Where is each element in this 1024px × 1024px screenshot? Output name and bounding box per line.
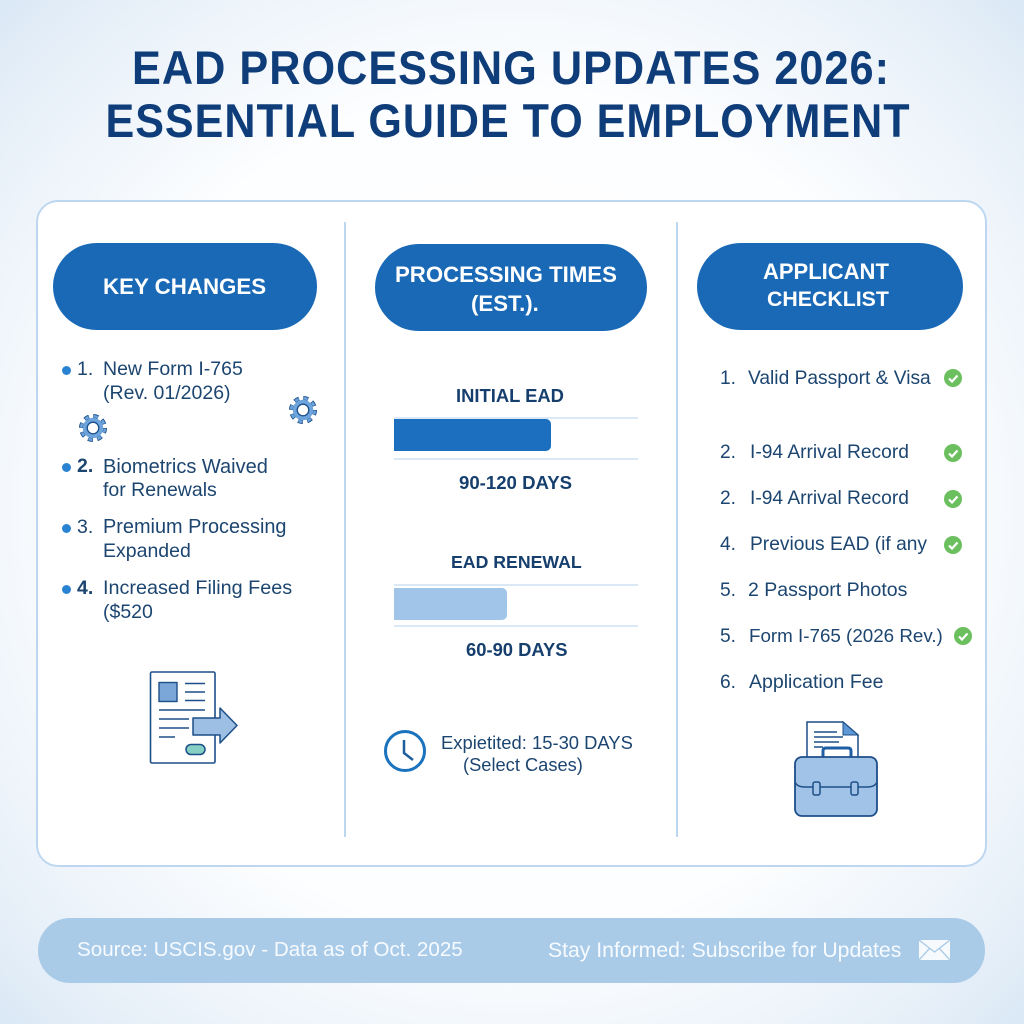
bar (394, 588, 507, 620)
expedited note: Expietited: 15-30 DAYS (441, 732, 633, 753)
heading: processing times: PROCESSING TIMES (395, 262, 617, 287)
heading: applicant checklist: APPLICANT (763, 259, 889, 284)
bar (394, 419, 551, 451)
item 4: Increased Filing Fees (103, 577, 292, 599)
item 5: 2 Passport Photos (748, 579, 907, 601)
icon: gear left (79, 414, 107, 442)
item 1: (Rev. 01/2026) (103, 382, 231, 404)
item 3 (720, 488, 962, 509)
expedited note (441, 732, 633, 775)
item 2: 2. (720, 442, 736, 463)
item 5: 5. (720, 580, 736, 601)
column divider left (344, 222, 346, 837)
item 3: 3. (77, 516, 93, 538)
main panel (36, 200, 987, 867)
item 3: 2. (720, 488, 736, 509)
icon: form with arrow (150, 671, 238, 764)
list: checklist (720, 368, 972, 693)
item 2: 2. (77, 455, 93, 477)
item 1: 1. (77, 358, 93, 380)
item 4: Previous EAD (if any (750, 534, 927, 555)
item 2 (720, 442, 962, 463)
column divider right (676, 222, 678, 837)
item 3: I-94 Arrival Record (750, 488, 909, 509)
heading: key changes (53, 243, 317, 330)
item 3: Premium Processing (103, 516, 286, 538)
value: 60-90 DAYS (466, 639, 568, 660)
item 1: 1. (720, 368, 736, 389)
heading: key changes: KEY CHANGES (103, 274, 266, 299)
label: EAD RENEWAL (451, 552, 582, 572)
label: INITIAL EAD (456, 385, 564, 406)
item 1: New Form I-765 (103, 358, 243, 380)
item 4: 4. (720, 534, 736, 555)
expedited note: (Select Cases) (463, 754, 583, 775)
icon: gear right (289, 396, 317, 424)
item 1 (62, 358, 243, 404)
title: ESSENTIAL GUIDE TO EMPLOYMENT (105, 94, 911, 147)
item 2 (62, 455, 268, 501)
title: EAD PROCESSING UPDATES 2026: (132, 41, 890, 94)
heading: applicant checklist (697, 243, 963, 330)
subscribe text: Stay Informed: Subscribe for Updates (548, 939, 901, 962)
icon: envelope (919, 940, 950, 960)
heading: processing times (375, 244, 647, 331)
item 2: Biometrics Waived (103, 456, 268, 478)
footer bar (38, 918, 985, 983)
icon: briefcase with document (794, 721, 878, 817)
item 6: Form I-765 (2026 Rev.) (749, 625, 943, 646)
item 2: I-94 Arrival Record (750, 442, 909, 463)
item 6: 5. (720, 626, 736, 647)
value: 90-120 DAYS (459, 472, 572, 493)
item 2: for Renewals (103, 479, 217, 501)
heading: applicant checklist: CHECKLIST (767, 287, 889, 311)
list: key changes (62, 358, 292, 623)
item 3: Expanded (103, 540, 191, 562)
item 7: Application Fee (749, 671, 883, 693)
chart: initial EAD (394, 385, 638, 493)
icon: clock (384, 730, 426, 772)
item 4 (62, 577, 292, 623)
source text: Source: USCIS.gov - Data as of Oct. 2025 (77, 938, 463, 961)
chart: EAD renewal (394, 552, 638, 660)
item 4: 4. (77, 577, 93, 599)
item 7: 6. (720, 672, 736, 693)
heading: processing times: (EST.). (471, 291, 539, 316)
title (105, 41, 911, 147)
item 3 (62, 516, 286, 562)
item 1: Valid Passport & Visa (748, 368, 931, 389)
item 4: ($520 (103, 601, 153, 623)
